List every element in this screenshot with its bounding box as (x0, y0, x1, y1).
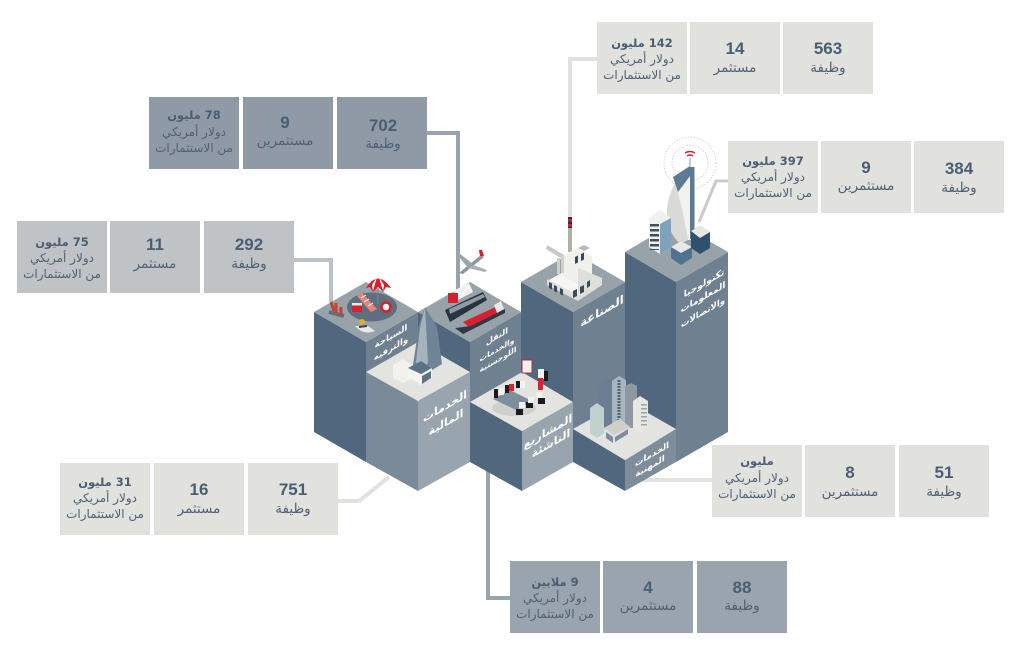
stat group: ICT: دولار أمريكي (741, 169, 805, 185)
stat group: ICT: وظيفة (941, 180, 977, 196)
stat group: industry: مستثمر (713, 60, 756, 76)
label: professional services: الخدمات (635, 440, 669, 470)
stat group: ICT: 9 (861, 158, 871, 177)
tower: professional services (573, 400, 676, 491)
connector: tourism (294, 260, 331, 302)
icon: ICT towers with signal (649, 137, 716, 265)
stat group: industry: 14 (726, 39, 745, 58)
label: transport: النقل (486, 326, 508, 348)
label: tourism: السياحة (375, 322, 407, 351)
stat group: financial services: 31 مليون (78, 475, 132, 490)
label: ICT: المعلومات (681, 280, 725, 316)
icon: airplane (457, 250, 487, 274)
stat group: industry (597, 22, 873, 94)
stat group: tourism: دولار أمريكي (30, 250, 94, 266)
stat group: transport: من الاستثمارات (155, 141, 233, 156)
icon: professional service buildings (590, 376, 648, 445)
stat group: financial services: مستثمر (177, 501, 220, 517)
stat group: transport: مستثمرين (257, 133, 313, 149)
tower: transport and logistics (418, 282, 521, 420)
label: ICT (681, 267, 725, 330)
stat group: industry: دولار أمريكي (610, 51, 674, 67)
label: financial services: الخدمات (423, 387, 467, 425)
tower: industry (521, 252, 625, 440)
stat group: professional services: 51 (935, 463, 953, 482)
stat group: professional services: من الاستثمارات (718, 487, 796, 502)
stat group: financial services: دولار أمريكي (73, 490, 137, 506)
stat group: tourism: 75 مليون (35, 235, 89, 250)
connector: startups (488, 468, 510, 598)
label: financial services: المالية (429, 406, 463, 439)
label: tourism: والترفيه (374, 334, 408, 364)
stat group: industry: 142 مليون (611, 36, 673, 51)
label: transport: اللوجستية (480, 344, 517, 374)
stat group: tourism: 292 (235, 235, 263, 254)
label: ICT: والاتصالات (681, 295, 725, 330)
label: startups: المشاريع (524, 411, 572, 453)
stat group: startups: 9 ملايين (531, 575, 579, 589)
stat group: startups (510, 561, 787, 633)
tower: tourism (314, 282, 418, 462)
stat group: professional services: وظيفة (926, 484, 962, 500)
stat group: industry: وظيفة (810, 60, 846, 76)
stat group: industry: من الاستثمارات (603, 68, 681, 83)
stat group: industry: 563 (814, 39, 842, 58)
stat group: financial services: وظيفة (275, 501, 311, 517)
icon: financial tower and bank (393, 307, 442, 385)
connector: financial services (338, 477, 389, 501)
stat group: tourism: من الاستثمارات (23, 267, 101, 282)
stat group: transport: دولار أمريكي (162, 124, 226, 140)
stat group: professional services: 8 (845, 463, 855, 482)
icon: beach scene (329, 277, 397, 333)
stat group: startups: وظيفة (724, 598, 760, 614)
stat group: financial services: من الاستثمارات (66, 507, 144, 522)
connector: transport (427, 133, 458, 292)
connector: ICT (699, 181, 728, 222)
stat group: startups: 4 (643, 578, 653, 597)
stat group: financial services (60, 463, 338, 535)
stat group: startups: 88 (733, 578, 751, 597)
stat group: ICT: 384 (945, 159, 974, 178)
stat group: transport (149, 97, 427, 169)
stat group: tourism: 11 (146, 235, 164, 254)
stat group: tourism: وظيفة (231, 256, 267, 272)
stat group: professional services: دولار أمريكي (725, 470, 789, 486)
label: transport: والخدمات (480, 335, 514, 364)
stat group: startups: مستثمرين (620, 598, 676, 614)
icon: factory (546, 217, 602, 301)
tower: financial services (366, 342, 470, 491)
stat group: financial services: 16 (190, 480, 208, 499)
stat group: ICT: مستثمرين (838, 178, 894, 194)
connector: industry (570, 59, 597, 217)
stat group: financial services: 751 (279, 480, 307, 499)
stat group: professional services: مستثمرين (822, 484, 878, 500)
stat group: transport: وظيفة (365, 136, 401, 152)
stat group: transport: 702 (369, 116, 397, 135)
stat group: ICT: من الاستثمارات (734, 186, 812, 201)
icon: truck, bus and ship (445, 283, 505, 334)
label: startups: الناشئة (532, 426, 570, 461)
connector: professional services (642, 478, 712, 482)
stat group: tourism: مستثمر (133, 256, 176, 272)
icon: startup meeting (492, 360, 548, 416)
stat group: startups: من الاستثمارات (516, 607, 594, 622)
stat group: professional services: مليون (740, 454, 774, 469)
stat group: transport: 78 مليون (167, 108, 221, 123)
tower: startups (470, 372, 573, 491)
stat group: startups: دولار أمريكي (523, 590, 587, 606)
label: ICT: تكنولوجيا (684, 267, 724, 300)
label: professional services: المهنية (635, 453, 665, 480)
label: transport (480, 326, 517, 374)
stat group: ICT (728, 141, 1004, 213)
stat group: ICT: 397 مليون (742, 154, 804, 169)
tower: ICT (625, 222, 728, 462)
stat group: tourism (17, 221, 294, 293)
label: industry: الصناعة (580, 292, 624, 330)
stat group: professional services (712, 445, 989, 517)
stat group: transport: 9 (280, 113, 290, 132)
